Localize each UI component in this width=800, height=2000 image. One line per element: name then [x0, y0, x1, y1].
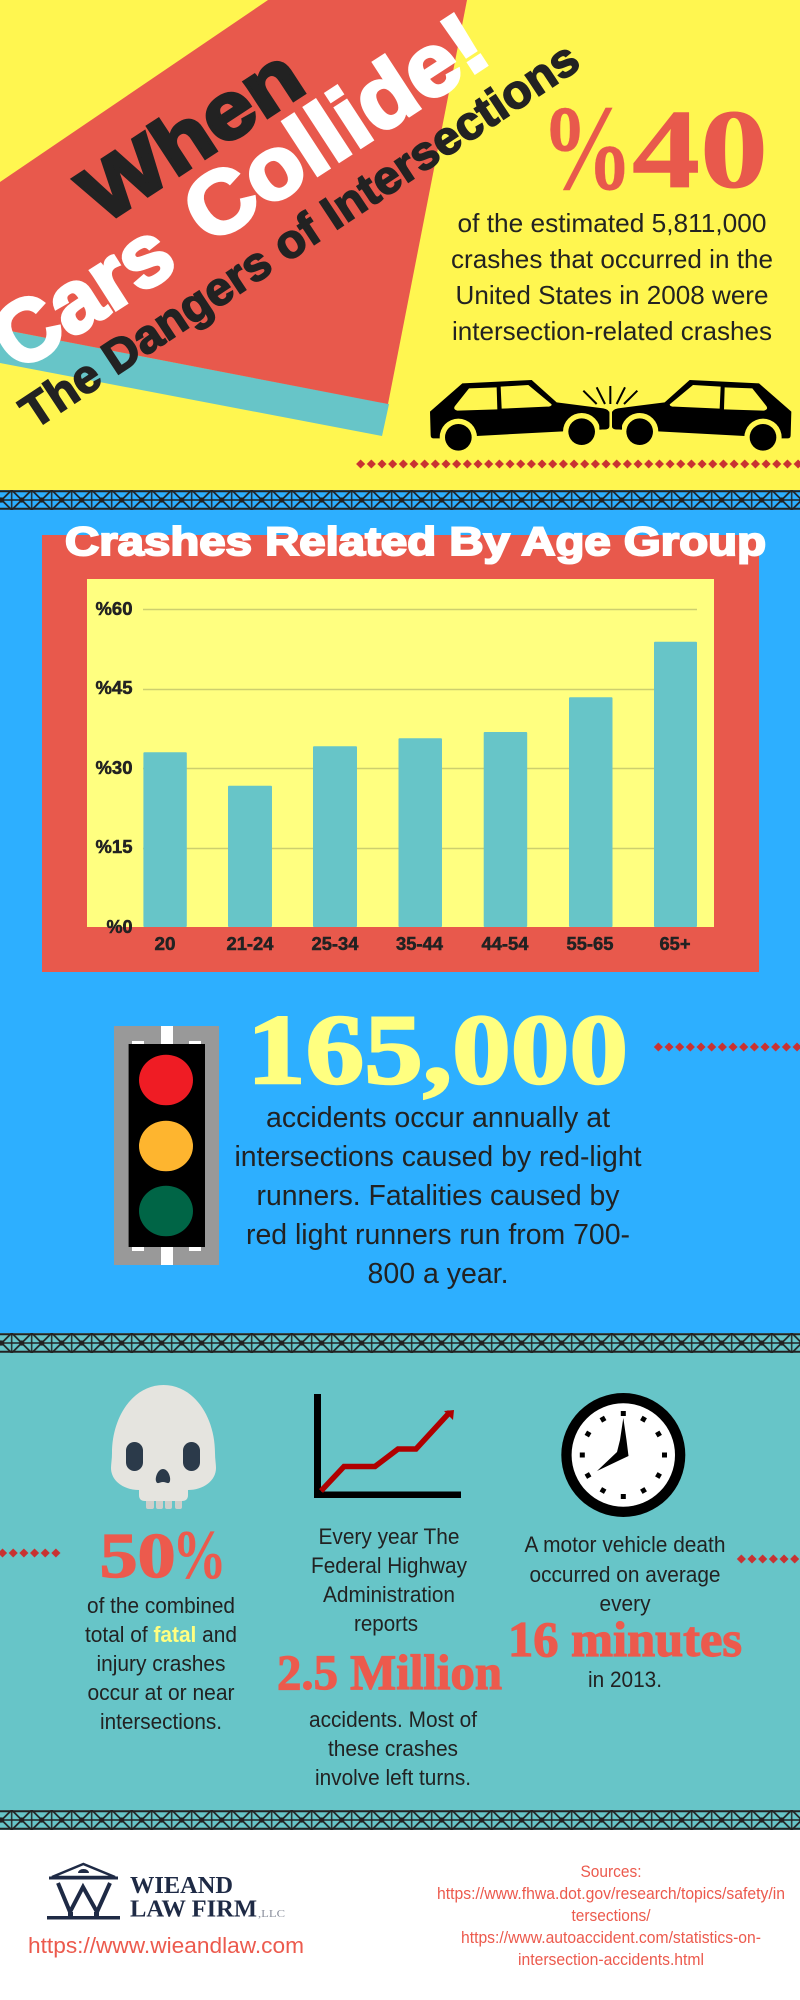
section background: blue	[0, 490, 800, 1333]
text: combined crashes: injury crashes	[96, 1651, 226, 1676]
icon: two cars colliding	[420, 380, 800, 456]
title line: When: When	[64, 30, 318, 239]
section background: teal	[0, 1333, 800, 1830]
text: motor vehicle death	[524, 1532, 726, 1616]
text: left turns: these crashes	[328, 1736, 458, 1761]
sources: https://www.autoaccident.com/statistics-on-	[461, 1928, 761, 1947]
sources: tersections/	[572, 1906, 651, 1925]
stat: 50%: 50	[100, 1520, 176, 1591]
website url: https://www.wieandlaw.com	[28, 1933, 304, 1958]
stat: %40: 40	[632, 87, 768, 212]
x axis labels: 55-65	[566, 934, 614, 954]
text: crash statistic paragraph: of the estimated 5,811,000	[458, 208, 766, 238]
text: federal highway intro: Federal Highway	[311, 1553, 467, 1578]
text: red-light runners paragraph	[234, 1102, 642, 1290]
sources: intersection-accidents.html	[518, 1950, 704, 1969]
text: crash statistic paragraph: United States in 2008 were	[456, 280, 768, 310]
icon: traffic light	[114, 1026, 219, 1265]
text: in 2013: in 2013.	[588, 1667, 662, 1692]
text: motor vehicle death: A motor vehicle death	[524, 1532, 726, 1557]
text: motor vehicle death: occurred on average	[530, 1562, 720, 1587]
section background: white footer	[0, 1830, 800, 2000]
stat: 2.5 Million: 2.5 Million	[277, 1644, 502, 1700]
y axis labels: %30	[96, 758, 132, 778]
text: red-light runners paragraph: intersections caused by red-light	[234, 1141, 642, 1173]
chart gridlines	[143, 610, 697, 848]
text: left turns	[309, 1707, 478, 1790]
text: red-light runners paragraph: red light runners run from 700-	[246, 1219, 630, 1251]
text: federal highway intro: Administration	[323, 1582, 455, 1607]
red title polygon	[0, 0, 467, 404]
sources: Sources:	[580, 1862, 642, 1881]
x axis labels	[154, 934, 690, 954]
chart plot area	[87, 579, 714, 927]
decorative diamond row: header	[355, 459, 800, 469]
text: red-light runners paragraph: 800 a year.	[368, 1258, 508, 1290]
y axis labels: %15	[96, 837, 132, 857]
icon: skull	[111, 1385, 216, 1509]
x axis labels: 21-24	[226, 934, 274, 954]
band: lattice under header	[0, 490, 800, 510]
title word: Collide!: Collide!	[165, 0, 504, 262]
chart heading: Crashes Related By Age Group	[65, 520, 766, 564]
stat: %40	[541, 81, 768, 216]
logo: Wieand Law Firm	[47, 1864, 285, 1922]
title	[0, 0, 588, 438]
text: red-light runners paragraph: accidents occur annually at	[266, 1102, 610, 1134]
logo wordmark: LAW FIRM	[130, 1896, 257, 1922]
logo wordmark: WIEAND	[130, 1873, 233, 1899]
icon: clock	[561, 1393, 685, 1517]
stat: 16 minutes: 16 minutes	[508, 1611, 742, 1667]
text: left turns: accidents. Most of	[309, 1707, 478, 1732]
text: crash statistic paragraph: intersection-related crashes	[452, 316, 772, 346]
panel: age group chart	[42, 535, 759, 972]
text: combined crashes: total of fatal and	[85, 1622, 237, 1647]
icon: rising line chart	[314, 1394, 461, 1498]
x axis labels: 35-44	[396, 934, 443, 954]
band: lattice above teal section	[0, 1333, 800, 1353]
x axis labels: 65+	[660, 934, 690, 954]
logo wordmark: ,LLC	[258, 1909, 285, 1920]
x axis labels: 20	[154, 934, 176, 954]
text: motor vehicle death: every	[600, 1591, 650, 1616]
text: combined crashes: intersections.	[100, 1709, 222, 1734]
section background: yellow header	[0, 0, 800, 490]
subtitle: The Dangers of Intersections	[10, 31, 588, 438]
stat: %40: %	[541, 81, 633, 216]
text: combined crashes: occur at or near	[88, 1680, 234, 1705]
logo wordmark	[130, 1873, 285, 1922]
y axis labels: %0	[106, 917, 132, 937]
stat: 50%: %	[172, 1517, 226, 1594]
chart frame	[42, 535, 759, 972]
stat: 165,000: 165,000	[247, 994, 628, 1105]
text: left turns: involve left turns.	[315, 1765, 471, 1790]
text: combined crashes: of the combined	[87, 1593, 235, 1618]
text: crash statistic paragraph: crashes that occurred in the	[451, 244, 773, 274]
band: lattice above footer	[0, 1810, 800, 1830]
decorative diamond row: left	[0, 1548, 61, 1558]
x axis labels: 25-34	[312, 934, 358, 954]
text: federal highway intro: Every year The	[318, 1524, 460, 1549]
y axis labels	[96, 599, 132, 937]
stat: 50%	[100, 1517, 226, 1594]
decorative diamond row: right of 165,000	[653, 1042, 800, 1052]
text: red-light runners paragraph: runners. Fatalities caused by	[256, 1180, 620, 1212]
sources	[437, 1862, 785, 1969]
y axis labels: %45	[96, 678, 132, 698]
text: combined crashes	[85, 1593, 237, 1734]
teal ribbon behind title	[0, 329, 389, 436]
text: federal highway intro	[311, 1524, 467, 1636]
decorative diamond row: right	[736, 1554, 800, 1564]
icon: temple W	[47, 1864, 120, 1920]
text: federal highway intro: reports	[354, 1611, 418, 1636]
y axis labels: %60	[96, 599, 132, 619]
bar chart	[143, 642, 697, 927]
text: crash statistic paragraph	[451, 208, 773, 346]
x axis labels: 44-54	[482, 934, 528, 954]
